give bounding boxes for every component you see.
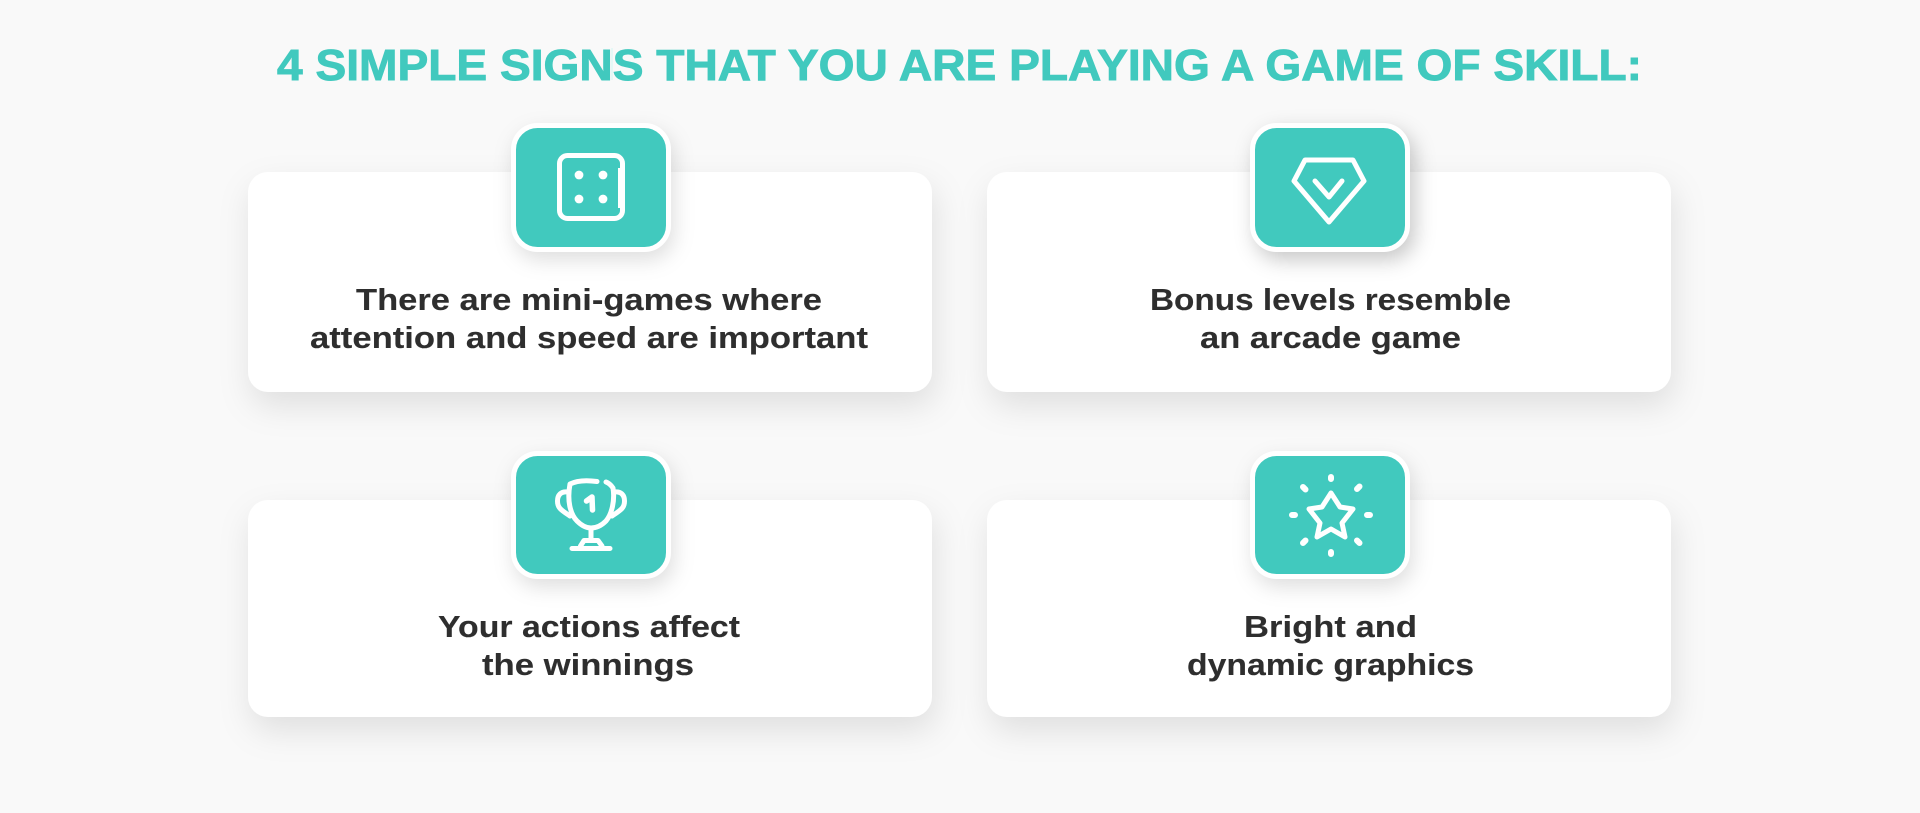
icon: dice — [560, 156, 622, 218]
title: 4 SIMPLE SIGNS THAT YOU ARE PLAYING A GAME OF SKILL: — [277, 41, 1642, 90]
panel: mini-games — [248, 126, 932, 392]
text: winnings: the winnings — [482, 647, 694, 682]
text: winnings — [438, 609, 740, 682]
text: winnings: Your actions affect — [438, 609, 740, 644]
text: mini-games — [310, 282, 868, 355]
icon: star — [1292, 477, 1370, 554]
text: graphics — [1187, 609, 1474, 682]
panel: winnings — [248, 454, 932, 717]
text: graphics: Bright and — [1244, 609, 1417, 644]
text: bonus levels — [1150, 282, 1511, 355]
text: mini-games: attention and speed are important — [310, 320, 868, 355]
text: mini-games: There are mini-games where — [356, 282, 822, 317]
icon: trophy — [558, 481, 624, 548]
text: graphics: dynamic graphics — [1187, 647, 1474, 682]
text: bonus levels: an arcade game — [1200, 320, 1461, 355]
text: bonus levels: Bonus levels resemble — [1150, 282, 1511, 317]
panel: graphics — [987, 454, 1671, 717]
icon: diamond — [1294, 160, 1364, 222]
panel: bonus levels — [987, 126, 1671, 392]
